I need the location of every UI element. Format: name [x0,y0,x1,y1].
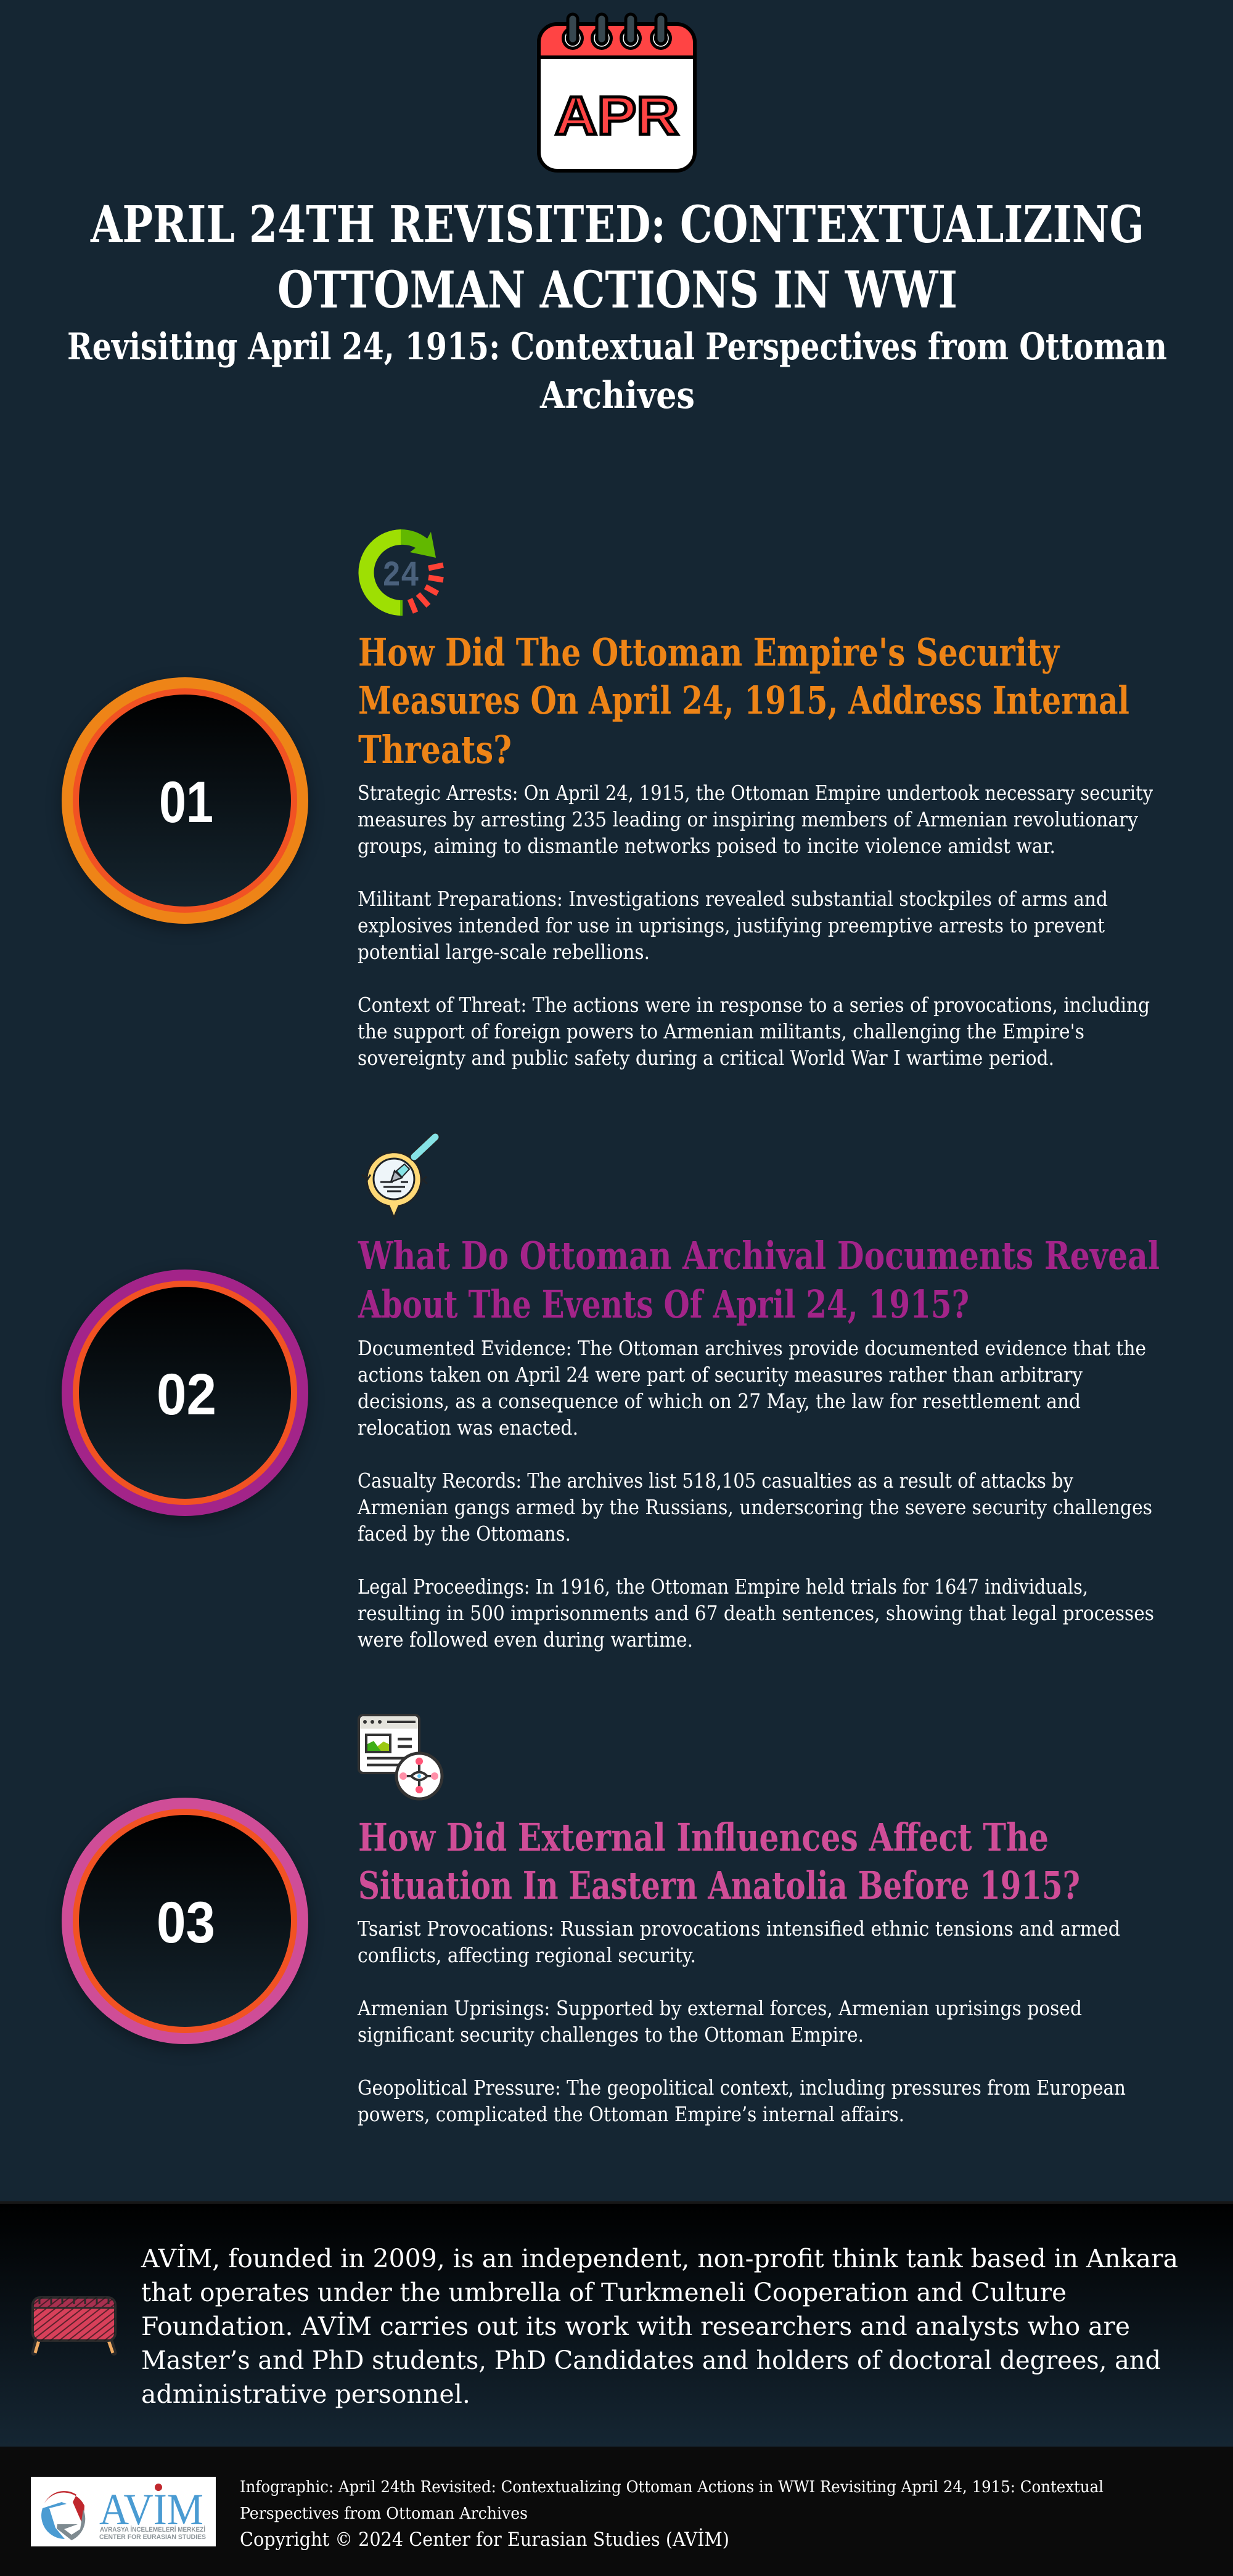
footer credit text: Copyright © 2024 Center for Eurasian Studies (AVİM) [240,2527,729,2551]
subtitle: Archives [539,374,695,417]
heading 01: How Did The Ottoman Empire's Security [358,630,1060,675]
footer credit text: Infographic: April 24th Revisited: Contextualizing Ottoman Actions in WWI Revisiting April 24, 1915: Contextual [240,2478,1104,2497]
icon: April calendar: APR [555,85,679,146]
body text 02: Documented Evidence: The Ottoman archives provide documented evidence that the [358,1336,1146,1360]
heading 03: How Did External Influences Affect The [358,1815,1049,1860]
body text 01: sovereignty and public safety during a critical World War I wartime period. [358,1046,1054,1070]
body text 02 [357,1336,1154,1652]
body text 03: powers, complicated the Ottoman Empire’s internal affairs. [358,2102,904,2126]
body text 03: Geopolitical Pressure: The geopolitical context, including pressures from European [358,2076,1126,2100]
body text 01: Context of Threat: The actions were in response to a series of provocations, including [358,993,1150,1017]
subtitle [67,325,1167,417]
about text: Master’s and PhD students, PhD Candidates and holders of doctoral degrees, and [141,2346,1161,2375]
body text 03: Armenian Uprisings: Supported by external forces, Armenian uprisings posed [357,1996,1082,2020]
heading 02 [358,1233,1160,1327]
heading 01 [358,630,1129,772]
icon: 24 hour cycle: 24 [382,556,419,597]
body text 03: Tsarist Provocations: Russian provocations intensified ethnic tensions and armed [358,1917,1120,1941]
logo: AVIM: AVRASYA İNCELEMELERİ MERKEZİ [100,2525,205,2533]
about text [141,2244,1178,2409]
body text 01: measures by arresting 235 leading or inspiring members of Armenian revolutionary [358,807,1138,831]
body text 02: resulting in 500 imprisonments and 67 death sentences, showing that legal processes [358,1601,1154,1625]
icon: 24 hour cycle [358,529,443,616]
heading 01: Threats? [358,727,512,772]
body text 01: explosives intended for use in uprisings, justifying preemptive arrests to prevent [358,913,1105,937]
body text 01: groups, aiming to dismantle networks poised to incite violence amidst war. [358,834,1055,858]
number badge 03: 03 [157,1890,215,1955]
body text 02: decisions, as a consequence of which on 27 May, the law for resettlement and [358,1389,1081,1413]
number badge 02 [62,1270,308,1520]
panel: about AVIM [0,2201,1233,2447]
number badge 02: 02 [157,1362,216,1427]
logo: AVIM [31,2477,216,2546]
icon: red bench [33,2297,115,2353]
body text 01: Militant Preparations: Investigations revealed substantial stockpiles of arms and [358,887,1108,911]
body text 02: were followed even during wartime. [358,1628,693,1652]
body text 01 [358,781,1153,1070]
body text 01: potential large-scale rebellions. [358,940,650,964]
about text: administrative personnel. [141,2379,470,2409]
footer credit text: Perspectives from Ottoman Archives [240,2505,528,2523]
footer credit text [240,2478,1104,2551]
title: OTTOMAN ACTIONS IN WWI [277,261,957,320]
about text: that operates under the umbrella of Turkmeneli Cooperation and Culture [141,2278,1067,2307]
heading 02: About The Events Of April 24, 1915? [358,1282,969,1327]
body text 02: Casualty Records: The archives list 518,105 casualties as a result of attacks by [358,1469,1073,1493]
body text 03: conflicts, affecting regional security. [358,1943,696,1967]
panel: section 02 [62,1137,1160,1652]
icon: browser window with network eye [359,1715,442,1799]
icon: April calendar [539,14,695,171]
body text 03 [357,1917,1126,2126]
logo: AVIM: CENTER FOR EURASIAN STUDIES [99,2533,206,2541]
title [90,195,1144,320]
body text 02: Legal Proceedings: In 1916, the Ottoman Empire held trials for 1647 individuals, [358,1575,1088,1599]
logo: AVIM: AVIM [99,2485,203,2534]
body text 01: the support of foreign powers to Armenian militants, challenging the Empire's [358,1019,1084,1043]
number badge 01: 01 [159,770,213,835]
icon: magnifier and pen [362,1137,435,1218]
heading 03 [358,1815,1080,1908]
body text 02: faced by the Ottomans. [358,1522,571,1546]
body text 02: Armenian gangs armed by the Russians, underscoring the severe security challenges [357,1495,1152,1519]
panel: footer [0,2447,1233,2576]
about text: Foundation. AVİM carries out its work with researchers and analysts who are [141,2312,1130,2341]
body text 03: significant security challenges to the Ottoman Empire. [358,2023,864,2047]
number badge 01 [62,677,308,927]
body text 02: relocation was enacted. [358,1416,578,1440]
panel: section 01 [62,529,1153,1070]
about text: AVİM, founded in 2009, is an independent, non-profit think tank based in Ankara [141,2244,1178,2273]
number badge 03 [62,1798,308,2048]
panel: section 03 [62,1715,1126,2126]
body text 02: actions taken on April 24 were part of security measures rather than arbitrary [358,1363,1083,1387]
